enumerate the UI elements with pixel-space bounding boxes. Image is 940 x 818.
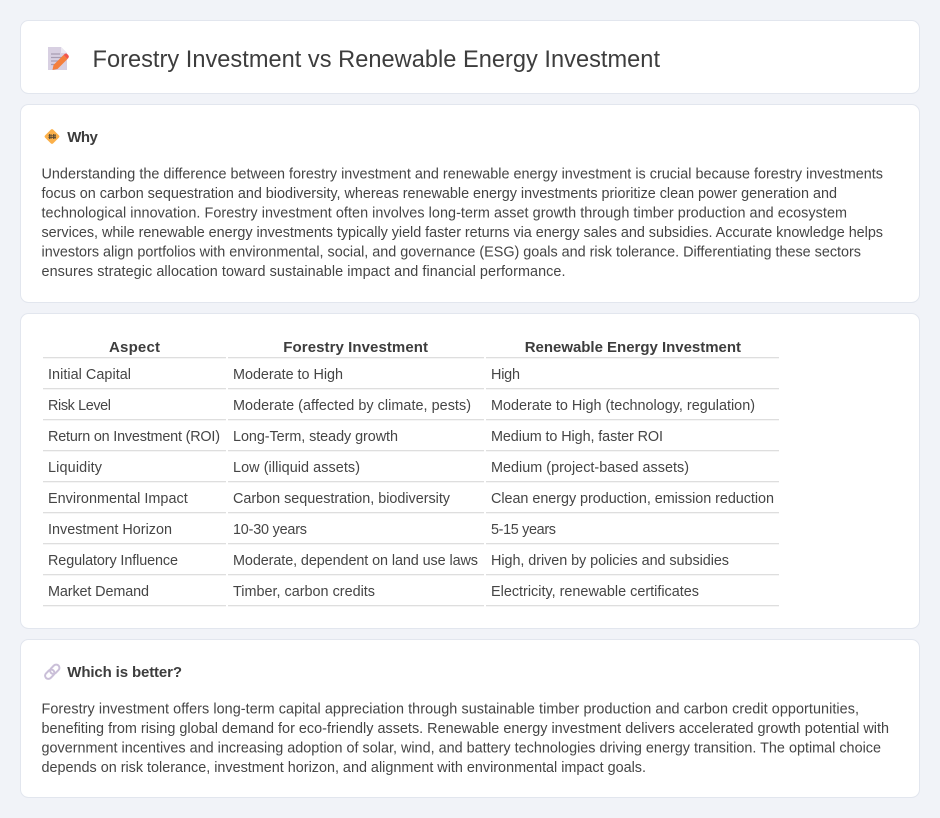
table row: liquidity <box>43 460 779 482</box>
text block: which is better paragraph: depends on risk tolerance, investment horizon, and alignment with environmental impact goals. <box>42 760 646 776</box>
text block: why paragraph: services, while renewable energy investments typically yield faster returns via energy sales and subsidies. Accurate knowledge helps <box>42 225 883 241</box>
table row: market demand <box>43 584 779 606</box>
text block: which is better paragraph: Forestry investment offers long-term capital appreciation through sustainable timber production and carbon credit opportunities, <box>42 702 859 718</box>
table row: risk level: Moderate (affected by climate, pests) <box>233 398 471 414</box>
panel: title header <box>20 20 920 94</box>
table row: return on investment: Return on Investment (ROI) <box>48 429 220 445</box>
heading: which is better: Which is better? <box>67 664 182 681</box>
table row: initial capital: Initial Capital <box>48 367 131 383</box>
table row: investment horizon: 10-30 years <box>233 522 307 538</box>
table row: investment horizon: 5-15 years <box>491 522 556 538</box>
table row: return on investment: Long-Term, steady growth <box>233 429 398 445</box>
table row: investment horizon: Investment Horizon <box>48 522 172 538</box>
table row: environmental impact: Environmental Impact <box>48 491 188 507</box>
table header row: Forestry Investment <box>283 339 428 356</box>
text block: why paragraph: technological innovation. Forestry investment often involves long-term asset growth through timber production and ecosystem <box>42 206 847 222</box>
table header row: Aspect <box>109 339 160 356</box>
table row: environmental impact: Clean energy production, emission reduction <box>491 491 774 507</box>
table row: return on investment: Medium to High, faster ROI <box>491 429 663 445</box>
table row: regulatory influence: Moderate, dependent on land use laws <box>233 553 478 569</box>
table row: risk level <box>43 398 779 420</box>
text block: why paragraph: Understanding the difference between forestry investment and renewable energy investment is crucial because forestry investments <box>42 166 883 182</box>
text block: which is better paragraph: benefiting from rising global demand for eco-friendly assets. Renewable energy investment delivers accelerated growth potential with <box>42 721 889 737</box>
title: Forestry Investment vs Renewable Energy Investment <box>92 47 660 73</box>
table row: environmental impact: Carbon sequestration, biodiversity <box>233 491 451 507</box>
table row: regulatory influence <box>43 553 779 575</box>
icon: warning diamond <box>44 128 60 145</box>
panel: why <box>20 104 920 302</box>
table row: market demand: Electricity, renewable certificates <box>491 584 699 600</box>
table row: investment horizon <box>43 522 779 544</box>
table header row: Renewable Energy Investment <box>525 339 741 356</box>
icon: chain link <box>44 663 61 680</box>
table row: return on investment <box>43 429 779 451</box>
table row: liquidity: Medium (project-based assets) <box>491 460 689 476</box>
table row: initial capital <box>43 367 779 389</box>
table header row <box>43 339 779 358</box>
table row: risk level: Risk Level <box>48 398 111 414</box>
table row: market demand: Market Demand <box>48 584 149 600</box>
panel: comparison table <box>20 314 920 628</box>
text block: why paragraph: focus on carbon sequestration and biodiversity, whereas renewable energy investments prioritize clean power generation and <box>42 186 837 202</box>
text block: why paragraph <box>42 166 883 280</box>
table row: initial capital: Moderate to High <box>233 367 343 383</box>
text block: which is better paragraph: government incentives and increasing adoption of solar, wind, and battery technologies driving energy transition. The optimal choice <box>42 740 881 756</box>
table row: regulatory influence: Regulatory Influence <box>48 553 178 569</box>
text block: why paragraph: ensures strategic allocation toward sustainable impact and financial performance. <box>42 264 566 280</box>
heading: why: Why <box>67 129 98 146</box>
text block: why paragraph: investors align portfolios with environmental, social, and governance (ESG) goals and risk tolerance. Differentiating these sectors <box>42 244 861 260</box>
table row: risk level: Moderate to High (technology, regulation) <box>491 398 755 414</box>
icon: document with pencil <box>48 47 69 70</box>
table row: liquidity: Liquidity <box>48 460 103 476</box>
table row: initial capital: High <box>491 367 520 383</box>
text block: which is better paragraph <box>42 702 889 776</box>
table row: market demand: Timber, carbon credits <box>233 584 375 600</box>
panel: which is better <box>20 640 920 798</box>
table row: liquidity: Low (illiquid assets) <box>233 460 360 476</box>
table row: regulatory influence: High, driven by policies and subsidies <box>491 553 729 569</box>
table row: environmental impact <box>43 491 779 513</box>
